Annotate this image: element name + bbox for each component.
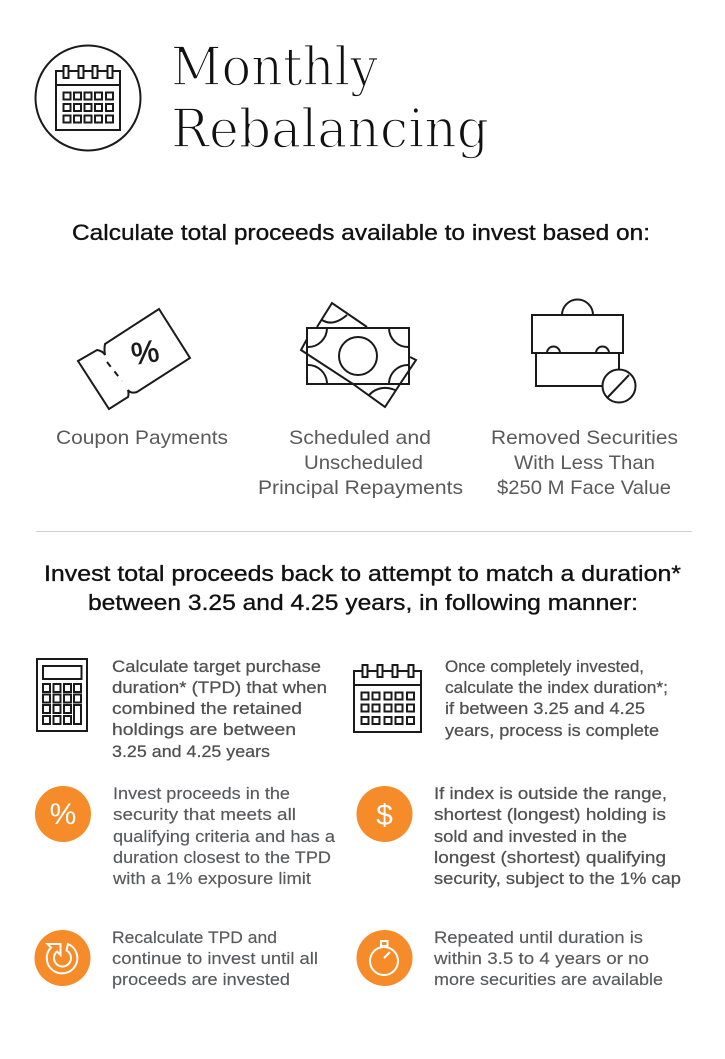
text: invest proceeds in security: qualifying criteria and has a bbox=[113, 827, 336, 846]
text: recalculate TPD: Recalculate TPD and bbox=[112, 928, 277, 947]
icon: calendar in circle bbox=[36, 46, 140, 150]
text: calculate target duration: holdings are between bbox=[112, 720, 296, 739]
text: calculate target duration: combined the retained bbox=[112, 699, 302, 718]
icon: banknotes bbox=[301, 303, 416, 407]
text: repeated until duration: within 3.5 to 4 years or no bbox=[433, 949, 649, 968]
icon: coupon: % bbox=[129, 333, 161, 372]
label: coupon payments: Coupon Payments bbox=[56, 427, 228, 449]
icon: calculator bbox=[37, 659, 87, 731]
icon: stopwatch badge bbox=[356, 930, 412, 986]
text: repeated until duration: Repeated until duration is bbox=[434, 928, 643, 947]
text: invest proceeds in security: security that meets all bbox=[113, 805, 296, 824]
heading: invest proceeds bbox=[44, 561, 681, 615]
text: recalculate TPD: proceeds are invested bbox=[112, 970, 290, 989]
label: principal repayments: Scheduled and bbox=[289, 427, 431, 449]
text: recalculate TPD bbox=[112, 928, 318, 989]
label: removed securities bbox=[491, 427, 678, 499]
text: index outside range bbox=[434, 784, 681, 888]
icon: calendar bbox=[354, 665, 421, 732]
heading: invest proceeds: between 3.25 and 4.25 years, in following manner: bbox=[88, 590, 638, 615]
icon: percent badge bbox=[35, 786, 91, 842]
label: principal repayments: Principal Repayments bbox=[258, 477, 463, 499]
text: index outside range: security, subject to the 1% cap bbox=[434, 869, 681, 888]
label: removed securities: Removed Securities bbox=[491, 427, 678, 449]
text: index outside range: If index is outside the range, bbox=[434, 784, 667, 803]
icon: coupon bbox=[78, 309, 190, 409]
text: once completely invested: years, process is complete bbox=[445, 721, 659, 740]
icon: briefcase with prohibition sign bbox=[532, 300, 636, 402]
text: index outside range: longest (shortest) qualifying bbox=[434, 848, 666, 867]
icon: recalculate badge bbox=[34, 930, 90, 986]
label: removed securities: $250 M Face Value bbox=[497, 477, 671, 499]
text: repeated until duration bbox=[433, 928, 663, 989]
text: recalculate TPD: continue to invest until all bbox=[112, 949, 318, 968]
heading: invest proceeds: Invest total proceeds back to attempt to match a duration* bbox=[44, 561, 681, 586]
text: calculate target duration bbox=[112, 657, 327, 761]
text: once completely invested bbox=[445, 657, 668, 740]
text: invest proceeds in security: with a 1% exposure limit bbox=[112, 869, 311, 888]
icon: dollar badge: $ bbox=[376, 799, 393, 832]
text: once completely invested: if between 3.25 and 4.25 bbox=[445, 699, 645, 718]
text: once completely invested: calculate the index duration*; bbox=[445, 678, 668, 697]
text: invest proceeds in security: Invest proceeds in the bbox=[113, 784, 290, 803]
text: invest proceeds in security: duration closest to the TPD bbox=[113, 848, 331, 867]
text: repeated until duration: more securities are available bbox=[434, 970, 663, 989]
label: principal repayments bbox=[258, 427, 463, 499]
title: Rebalancing bbox=[171, 99, 489, 160]
text: calculate target duration: Calculate target purchase bbox=[112, 657, 321, 676]
label: principal repayments: Unscheduled bbox=[304, 452, 423, 474]
text: once completely invested: Once completely invested, bbox=[445, 657, 644, 676]
text: calculate target duration: duration* (TPD) that when bbox=[112, 678, 327, 697]
icon: dollar badge bbox=[356, 786, 412, 842]
icon: percent badge: % bbox=[50, 798, 76, 831]
text: index outside range: sold and invested in the bbox=[434, 827, 627, 846]
text: index outside range: shortest (longest) holding is bbox=[434, 805, 666, 824]
heading: calculate proceeds: Calculate total proceeds available to invest based on: bbox=[72, 220, 650, 245]
title bbox=[171, 37, 489, 160]
label: removed securities: With Less Than bbox=[514, 452, 655, 474]
text: invest proceeds in security bbox=[112, 784, 336, 888]
title: Monthly bbox=[171, 37, 378, 98]
text: calculate target duration: 3.25 and 4.25 years bbox=[112, 742, 270, 761]
